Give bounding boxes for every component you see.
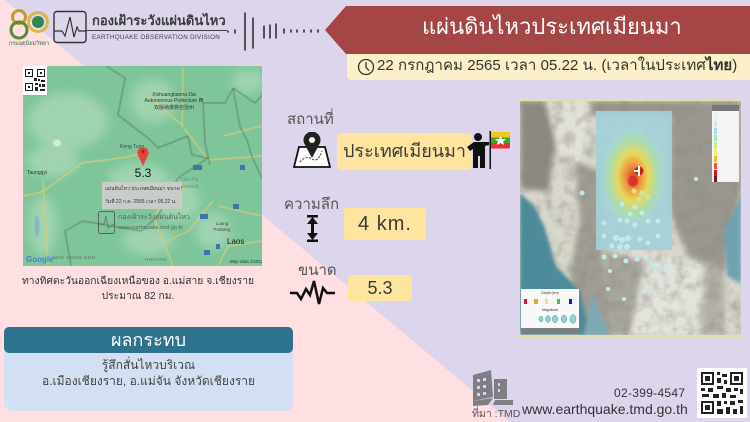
icon: clock bbox=[358, 58, 374, 76]
magnitude value bbox=[348, 275, 412, 301]
division logo bbox=[53, 10, 227, 44]
legend: depth and magnitude: Depth (km) bbox=[541, 291, 559, 295]
heading: depth: ความลึก bbox=[284, 196, 339, 213]
watermark logo bbox=[98, 211, 190, 234]
location description: ทางทิศตะวันออกเฉียงเหนือของ อ.แม่สาย จ.เชียงราย bbox=[22, 276, 254, 287]
logo: 80 years department bbox=[9, 9, 49, 47]
magnitude label: 5.3 bbox=[135, 166, 151, 180]
date bar bbox=[347, 54, 750, 80]
impact text bbox=[42, 356, 255, 388]
icon: map pin bbox=[293, 132, 331, 168]
icon: seismograph box bbox=[53, 10, 87, 44]
magnitude value: 5.3 bbox=[367, 278, 393, 298]
qr code: map corner bbox=[23, 66, 47, 95]
map label: Mae Hong Son: MAE HONG SON bbox=[53, 256, 96, 261]
legend: depth and magnitude: Magnitude bbox=[542, 308, 558, 312]
legend: depth and magnitude bbox=[521, 289, 579, 333]
icon: depth arrow bbox=[307, 215, 318, 242]
logo: 80 years department: กรมอุตุนิยมวิทยา bbox=[9, 40, 49, 47]
impact heading: ผลกระทบ bbox=[111, 330, 186, 350]
location description bbox=[22, 275, 254, 302]
info caption box: วันที่ 22 ก.ค. 2565 เวลา 05.22 น. bbox=[105, 199, 176, 205]
phone number: 02-399-4547 bbox=[614, 386, 685, 400]
marker: epicentre pin bbox=[138, 147, 148, 166]
location value bbox=[337, 133, 472, 170]
title: แผ่นดินไหวประเทศเมียนมา bbox=[422, 14, 682, 39]
depth value bbox=[344, 208, 426, 240]
title banner bbox=[325, 6, 750, 54]
info caption box bbox=[102, 182, 182, 209]
map label: Phayao: PHAYAO bbox=[145, 258, 167, 263]
watermark logo: www.earthquake.tmd.go.th bbox=[118, 225, 183, 231]
website: www.earthquake.tmd.go.th bbox=[522, 401, 688, 417]
legend: intensity bbox=[712, 105, 739, 182]
icon: collapsed building bbox=[473, 370, 513, 406]
terrain texture bbox=[520, 101, 741, 335]
google logo: Google bbox=[26, 255, 54, 264]
map label: Xishuangbanna: Xishuangbanna Dai Autonomous Prefecture 西双版纳傣族自治州 bbox=[145, 92, 203, 111]
heading: magnitude: ขนาด bbox=[298, 262, 337, 279]
icon: person with Myanmar flag bbox=[467, 131, 510, 169]
map label: Keng Tung: Keng Tung bbox=[120, 144, 144, 150]
impact text: รู้สึกสั่นไหวบริเวณ bbox=[102, 358, 195, 372]
division name English: EARTHQUAKE OBSERVATION DIVISION bbox=[92, 34, 220, 41]
source label: ที่มา :TMD bbox=[472, 408, 520, 420]
impact text: อ.เมืองเชียงราย, อ.แม่จัน จังหวัดเชียงราย bbox=[42, 374, 255, 388]
map label: Luang Prabang: Luang Prabang bbox=[213, 221, 230, 232]
shakemap overlay bbox=[596, 111, 672, 250]
map: epicentre location bbox=[23, 66, 262, 266]
icon: seismic wave bbox=[290, 280, 335, 304]
map label: Taunggyi: Taunggyi bbox=[27, 170, 47, 176]
panel: impact bbox=[4, 327, 293, 411]
map label: Nam Ha: Nam Ha National bbox=[180, 177, 198, 190]
watermark logo: กองเฝ้าระวังแผ่นดินไหว bbox=[118, 214, 190, 221]
division name: กองเฝ้าระวังแผ่นดินไหว bbox=[92, 13, 226, 28]
location description: ประมาณ 82 กม. bbox=[102, 291, 174, 302]
qr code: website bbox=[697, 368, 747, 418]
location value: ประเทศเมียนมา bbox=[343, 141, 466, 161]
map: shakemap bbox=[519, 100, 742, 337]
map label: Laos: Laos bbox=[227, 237, 244, 246]
aftershock markers bbox=[575, 157, 698, 301]
date text: 22 กรกฎาคม 2565 เวลา 05.22 น. (เวลาในประเทศไทย) bbox=[377, 57, 737, 74]
icon: sound wave decoration bbox=[227, 12, 319, 51]
depth value: 4 km. bbox=[358, 213, 412, 235]
impact heading bbox=[4, 327, 293, 353]
heading: location: สถานที่ bbox=[287, 111, 334, 128]
